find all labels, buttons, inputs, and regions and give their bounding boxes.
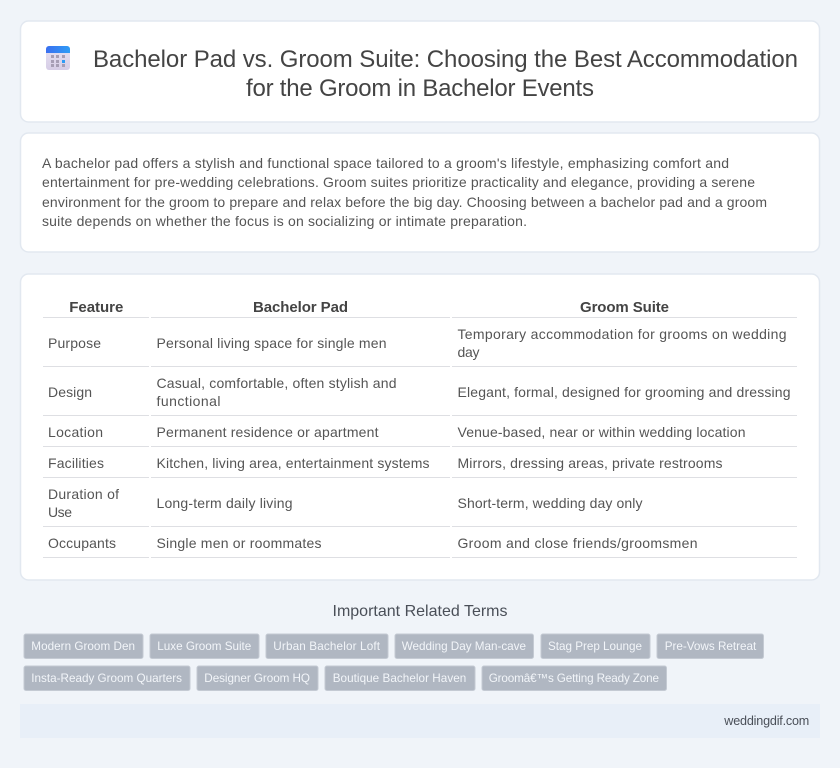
tag bbox=[395, 634, 534, 658]
tag: Wedding Day Man-cave bbox=[402, 640, 526, 653]
tag bbox=[24, 666, 190, 690]
row: purpose: Personal living space for single men bbox=[156, 335, 386, 351]
row: duration of use bbox=[48, 486, 642, 520]
row: occupants: Groom and close friends/groomsmen bbox=[458, 535, 698, 551]
intro paragraph: environment for the groom to prepare and relax before the big day. Choosing between a bachelor pad and a groom bbox=[42, 194, 767, 210]
tag: Designer Groom HQ bbox=[204, 672, 310, 685]
row: occupants: Single men or roommates bbox=[156, 535, 322, 551]
row: location bbox=[48, 424, 746, 440]
row: design bbox=[48, 375, 790, 409]
tag: Luxe Groom Suite bbox=[157, 640, 251, 653]
title text: for the Groom in Bachelor Events bbox=[246, 75, 594, 102]
row: design: Elegant, formal, designed for grooming and dressing bbox=[458, 384, 790, 400]
tag: Stag Prep Lounge bbox=[548, 640, 642, 653]
tag: Pre-Vows Retreat bbox=[665, 640, 757, 653]
row: design: functional bbox=[156, 393, 220, 409]
row: facilities: Facilities bbox=[48, 455, 104, 471]
tag: Urban Bachelor Loft bbox=[273, 640, 381, 653]
intro paragraph: suite depends on whether the focus is on socializing or intimate preparation. bbox=[42, 213, 527, 229]
panel: introduction bbox=[20, 133, 820, 252]
tag bbox=[197, 666, 318, 690]
row: duration of use: Duration of bbox=[48, 486, 119, 502]
footer: weddingdif.com bbox=[723, 714, 809, 728]
tag: Boutique Bachelor Haven bbox=[333, 672, 466, 685]
tag: Insta-Ready Groom Quarters bbox=[31, 672, 182, 685]
tag bbox=[541, 634, 650, 658]
title text bbox=[93, 46, 798, 102]
row: location: Permanent residence or apartment bbox=[156, 424, 379, 440]
row: location: Venue-based, near or within wedding location bbox=[458, 424, 746, 440]
tag: Modern Groom Den bbox=[31, 640, 135, 653]
intro paragraph: entertainment for pre-wedding celebrations. Groom suites prioritize practicality and elegance, providing a serene bbox=[42, 174, 755, 190]
row: design: Casual, comfortable, often stylish and bbox=[156, 375, 396, 391]
row: design: Design bbox=[48, 384, 92, 400]
tag bbox=[325, 666, 475, 690]
row: purpose: Temporary accommodation for grooms on wedding bbox=[458, 326, 786, 342]
row: facilities bbox=[48, 455, 722, 471]
table header bbox=[69, 299, 669, 316]
row: occupants bbox=[48, 535, 698, 551]
row: duration of use: Use bbox=[48, 504, 72, 520]
panel: title bbox=[20, 21, 820, 122]
tags: related terms bbox=[24, 634, 764, 690]
tag bbox=[657, 634, 764, 658]
panel: comparison table bbox=[20, 274, 820, 580]
tag bbox=[482, 666, 666, 690]
table header: Feature bbox=[69, 299, 123, 316]
footer bbox=[20, 704, 820, 738]
row: duration of use: Short-term, wedding day only bbox=[458, 495, 642, 511]
tag bbox=[24, 634, 143, 658]
table header: Groom Suite bbox=[580, 299, 669, 316]
intro paragraph: A bachelor pad offers a stylish and functional space tailored to a groom's lifestyle, emphasizing comfort and bbox=[42, 155, 729, 171]
row: facilities: Mirrors, dressing areas, private restrooms bbox=[458, 455, 722, 471]
tag bbox=[266, 634, 388, 658]
tag bbox=[150, 634, 259, 658]
intro paragraph bbox=[42, 155, 767, 229]
row: purpose: day bbox=[458, 344, 480, 360]
row: duration of use: Long-term daily living bbox=[156, 495, 292, 511]
table header: Bachelor Pad bbox=[253, 299, 348, 316]
row: purpose bbox=[48, 326, 786, 360]
row: occupants: Occupants bbox=[48, 535, 116, 551]
tag: Groomâ€™s Getting Ready Zone bbox=[489, 672, 659, 685]
row: facilities: Kitchen, living area, entertainment systems bbox=[156, 455, 430, 471]
title text: Bachelor Pad vs. Groom Suite: Choosing the Best Accommodation bbox=[93, 46, 798, 73]
row: purpose: Purpose bbox=[48, 335, 101, 351]
row: location: Location bbox=[48, 424, 103, 440]
icon: calendar bbox=[46, 46, 70, 70]
heading: related terms: Important Related Terms bbox=[332, 603, 508, 620]
